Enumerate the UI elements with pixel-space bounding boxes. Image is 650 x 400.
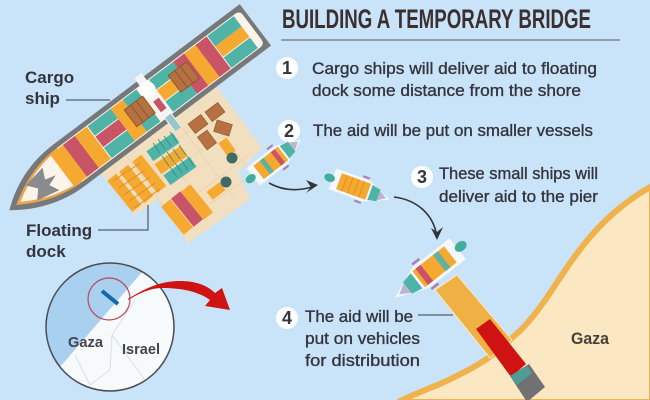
land: Gaza shore: [398, 186, 650, 400]
step 1: Cargo ships will deliver aid to floating: [312, 60, 597, 78]
pier: [435, 275, 512, 358]
locator highlight circle: [88, 278, 130, 320]
arrow: step 3 to 4: [394, 197, 443, 240]
step 3: 3: [417, 167, 427, 187]
step 4: put on vehicles: [305, 330, 420, 348]
cargo ship: [0, 1, 278, 240]
step 2: 2: [284, 121, 294, 141]
label: cargo ship: Cargo: [25, 68, 74, 87]
step 1: 1: [282, 58, 292, 78]
orange and red container stacks: [161, 184, 213, 235]
locator map: [46, 263, 174, 391]
teal and orange container rows: [146, 132, 197, 185]
step 4: [276, 307, 453, 370]
arrow: step 2 to 3: [269, 180, 318, 193]
step 3: deliver aid to the pier: [439, 188, 599, 206]
step 1: [276, 57, 597, 100]
crates on deck: [124, 62, 200, 127]
map label Israel: Israel: [122, 341, 160, 358]
map label Gaza: Gaza: [68, 334, 104, 351]
orange container stacks: [107, 155, 166, 212]
crane: [131, 71, 184, 134]
boat at dock: [238, 129, 309, 192]
step 4: for distribution: [305, 352, 420, 370]
pier marker: [102, 291, 118, 304]
red arrow from map: [128, 281, 230, 310]
title rule: [281, 39, 620, 41]
step 4: 4: [282, 308, 292, 328]
truck: [476, 319, 545, 400]
wooden crates: [188, 102, 232, 150]
containers: [50, 16, 258, 186]
floating dock: [100, 87, 262, 243]
step 4: The aid will be: [305, 308, 413, 326]
boat at pier: [385, 230, 475, 310]
label: floating dock: [26, 205, 148, 261]
label: cargo ship: [25, 68, 110, 108]
step 2: The aid will be put on smaller vessels: [313, 122, 593, 140]
boat in transit: [320, 164, 394, 212]
label: floating dock: Floating: [26, 221, 92, 240]
forklift vehicles: [207, 138, 238, 200]
step 1: dock some distance from the shore: [312, 82, 581, 100]
bow bridge: [23, 164, 64, 205]
step 3: These small ships will: [439, 165, 598, 183]
label: cargo ship: ship: [25, 89, 60, 108]
step 3: [411, 165, 599, 206]
label: floating dock: dock: [26, 242, 66, 261]
land label Gaza: Gaza: [571, 330, 610, 348]
